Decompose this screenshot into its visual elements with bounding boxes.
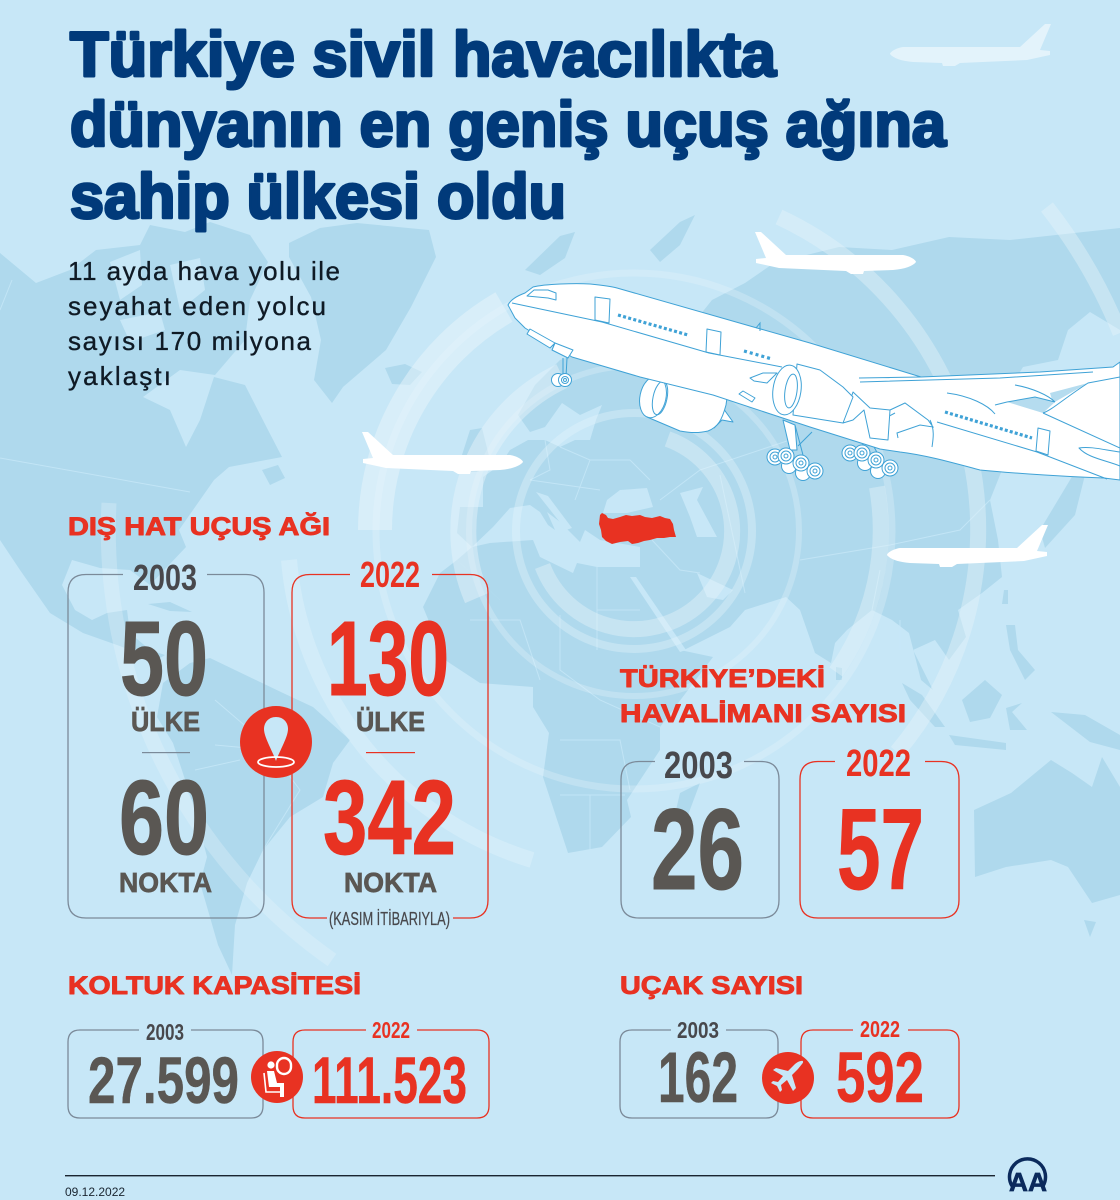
panel: seat capacity 2022: 111.523 (312, 1043, 467, 1117)
panel: seat capacity 2003: 27.599 (88, 1043, 239, 1117)
subtitle: 11 ayda hava yolu ile (68, 256, 340, 286)
panel: aircraft count 2003: 162 (658, 1039, 738, 1118)
subtitle: yaklaştı (68, 361, 171, 391)
fuselage and wing (508, 284, 1120, 480)
subtitle: sayısı 170 milyona (68, 326, 312, 356)
panel: international network 2003: 60 (119, 759, 209, 877)
panel: international network 2003: NOKTA (119, 867, 212, 898)
plane silhouette: top right (890, 24, 1051, 66)
plane silhouette: upper centre (755, 232, 916, 274)
panel: airports 2003: 26 (651, 786, 744, 914)
nose landing gear (552, 358, 572, 386)
panel: seat capacity 2022 (293, 1017, 489, 1118)
panel: aircraft count 2022: 2022 (860, 1016, 900, 1042)
panel: airports 2003: 2003 (664, 745, 733, 787)
panel: international network 2022: ÜLKE (356, 706, 425, 737)
plane silhouette: lower right (887, 525, 1048, 567)
title: dünyanın en geniş uçuş ağına (70, 90, 947, 160)
title (70, 20, 947, 232)
panel: aircraft count 2022 (801, 1016, 959, 1118)
panel: international network 2022: NOKTA (344, 867, 437, 898)
panel: aircraft count 2022: 592 (836, 1039, 924, 1118)
panel: seat capacity 2022: 2022 (372, 1017, 410, 1043)
panel: aircraft count 2003 (620, 1017, 778, 1118)
heading: aircraft count: UÇAK SAYISI (620, 972, 803, 1000)
panel: international network 2003: ÜLKE (131, 706, 200, 737)
large airliner illustration (508, 284, 1120, 480)
plane silhouette: left (362, 432, 523, 474)
heading: seat capacity: KOLTUK KAPASİTESİ (68, 972, 361, 1000)
panel: international network 2022: 2022 (360, 554, 420, 595)
panel: international network 2022: 130 (327, 600, 449, 718)
far engine (636, 374, 733, 432)
panel: seat capacity 2003: 2003 (146, 1019, 184, 1045)
panel: international network 2022: 342 (323, 759, 456, 877)
airframe detail lines (512, 290, 1120, 479)
logo: AA: AA (1009, 1167, 1047, 1197)
heading: international network: DIŞ HAT UÇUŞ AĞI (68, 512, 330, 541)
icon: seated passenger (251, 1051, 303, 1103)
gap between wing and rear fuselage (1007, 383, 1088, 413)
panel: airports 2022: 2022 (846, 743, 911, 785)
main landing gear (767, 420, 898, 480)
radar rings (108, 207, 1120, 960)
subtitle: seyahat eden yolcu (68, 291, 326, 321)
icon: location pin (240, 706, 312, 778)
panel: airports 2022 (800, 743, 959, 918)
heading: airports (620, 664, 906, 728)
subtitle (68, 256, 340, 391)
panel: international network 2003: 2003 (133, 557, 197, 598)
map water details and borders (110, 250, 733, 652)
heading: airports: TÜRKİYE’DEKİ (620, 664, 825, 693)
panel: airports 2022: 57 (837, 786, 924, 914)
panel: international network 2003: 50 (120, 600, 208, 718)
map highlight: Turkey (599, 513, 676, 544)
panel: international network 2022 (292, 554, 488, 929)
date: 09.12.2022 (65, 1185, 125, 1199)
near engine (770, 363, 890, 440)
panel: seat capacity 2003 (68, 1019, 263, 1118)
title: sahip ülkesi oldu (70, 162, 566, 232)
panel: international network 2003 (68, 557, 264, 918)
panel: airports 2003 (621, 745, 779, 918)
icon: airplane (762, 1052, 814, 1104)
panel: aircraft count 2003: 2003 (677, 1017, 719, 1043)
footer rule (65, 1175, 995, 1176)
title: Türkiye sivil havacılıkta (70, 20, 777, 90)
panel: international network 2022: (KASIM İTİBARIYLA) (329, 909, 450, 929)
world map background (0, 215, 1120, 975)
heading: airports: HAVALİMANI SAYISI (620, 700, 906, 728)
